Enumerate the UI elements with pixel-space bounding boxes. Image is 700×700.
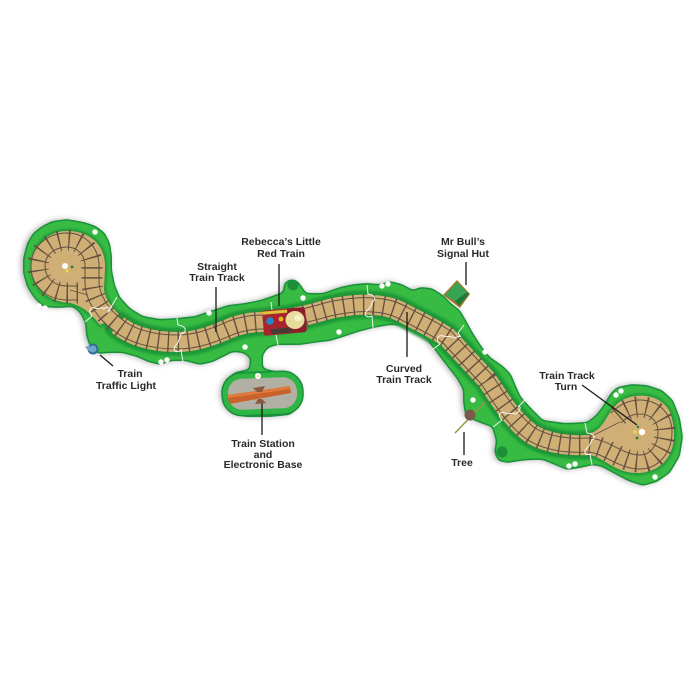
dark grass shadow along track — [33, 231, 674, 473]
ground holes — [288, 280, 508, 458]
Mr Bull's signal hut — [443, 280, 470, 308]
left loop ground — [33, 231, 120, 325]
label: Straight Train Track: Straight — [197, 261, 237, 273]
leader: traffic light — [100, 355, 113, 366]
label: Straight Train Track: Train Track — [189, 272, 245, 284]
label: Train Track Turn: Turn — [555, 381, 577, 393]
label: Train Station and Electronic Base: and — [254, 449, 272, 461]
label: Mr Bull's Signal Hut: Mr Bull’s — [441, 236, 485, 248]
label: Rebecca's Little Red Train: Red Train — [257, 248, 305, 260]
leader: curved track — [406, 312, 408, 357]
flowers — [36, 229, 658, 480]
tree — [455, 402, 485, 433]
label: Train Track Turn: Train Track — [539, 370, 595, 382]
train traffic light — [85, 344, 98, 354]
left loop centre flowers — [62, 263, 73, 273]
leader: red train — [278, 264, 280, 306]
label: Curved Train Track: Train Track — [376, 374, 432, 386]
label: Train Station and Electronic Base: Train Station — [231, 438, 295, 450]
leader: signal hut — [465, 262, 467, 285]
Rebecca's little red train — [262, 307, 307, 336]
label: Train Station and Electronic Base: Electronic Base — [224, 459, 303, 471]
right loop ground — [590, 396, 674, 473]
jigsaw joins between track pieces — [85, 285, 594, 465]
label: Curved Train Track: Curved — [386, 363, 422, 375]
leader: track turn — [582, 385, 637, 425]
leader: tree — [463, 432, 465, 455]
leader: straight track — [215, 287, 217, 332]
label: Rebecca's Little Red Train: Rebecca’s Little — [241, 236, 321, 248]
train station and electronic base — [221, 371, 304, 416]
leader: station — [261, 403, 263, 435]
label: Train Traffic Light: Traffic Light — [96, 380, 157, 392]
train track — [38, 240, 665, 462]
label: Mr Bull's Signal Hut: Signal Hut — [437, 248, 489, 260]
right loop centre flowers — [633, 426, 645, 439]
label: Train Traffic Light: Train — [117, 368, 143, 380]
green landscape base — [23, 219, 683, 486]
label: Tree: Tree — [451, 457, 473, 469]
